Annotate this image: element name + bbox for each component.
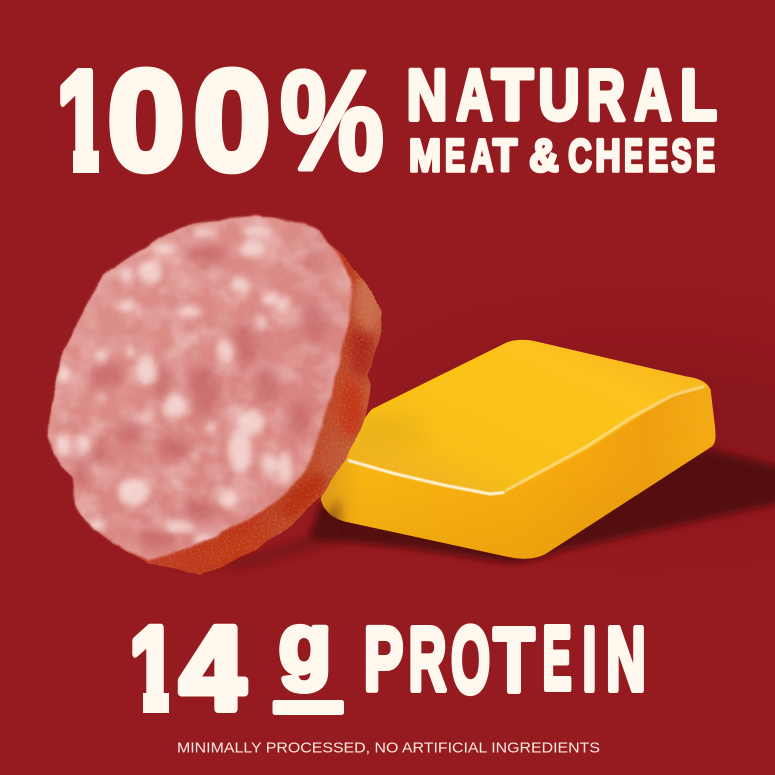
heading: natural: U [538, 55, 580, 135]
word: protein: P [364, 610, 403, 710]
heading: natural: N [407, 55, 447, 135]
illustration: sausage slice [40, 205, 390, 585]
heading: meat and cheese [409, 129, 715, 182]
fat blobs [55, 227, 292, 542]
heading: meat and cheese: E [696, 131, 715, 182]
word: protein: T [494, 609, 534, 710]
stat number: 14 [132, 624, 248, 713]
heading: meat and cheese: M [409, 130, 441, 181]
stat number: 14: 1 [129, 602, 177, 734]
cheese body [320, 340, 716, 559]
cheese top face [350, 335, 713, 493]
illustration: cheese cube [310, 330, 775, 570]
heading: meat and cheese: C [568, 131, 592, 181]
stat number: 14: 4 [180, 602, 245, 734]
footnote: MINIMALLY PROCESSED, NO ARTIFICIAL INGREDIENTS [177, 740, 600, 756]
heading: natural: T [492, 56, 533, 135]
sausage crust [40, 205, 390, 585]
sausage face with fat marbling [46, 214, 354, 562]
heading: natural: L [680, 56, 717, 135]
cheese highlight edges [349, 461, 503, 494]
heading: natural: A [457, 56, 492, 135]
unit: g with underline: g [279, 597, 331, 692]
heading: meat and cheese: A [471, 131, 493, 182]
lean meat patches [71, 246, 328, 546]
title: 100% natural meat and cheese [60, 66, 718, 174]
heading: meat and cheese: E [445, 131, 465, 182]
heading: meat and cheese: & [529, 131, 559, 182]
headline number: 100%: % [280, 43, 384, 199]
word: protein: N [606, 609, 646, 709]
heading: meat and cheese: T [493, 130, 517, 182]
word: protein: O [451, 607, 490, 712]
heading: natural [407, 55, 717, 136]
sausage body [40, 205, 390, 585]
heading: meat and cheese: S [671, 131, 692, 182]
word: protein: I [583, 610, 596, 710]
word: protein [364, 607, 646, 712]
headline number: 100%: 1 [57, 42, 107, 200]
word: protein: R [409, 608, 446, 710]
unit: g with underline [272, 597, 344, 715]
heading: meat and cheese: E [648, 131, 668, 182]
stat: 14 g protein [132, 623, 644, 715]
headline number: 100%: 0 [108, 41, 184, 199]
cheese shadow [310, 450, 775, 563]
heading: natural: A [635, 56, 671, 136]
heading: meat and cheese: E [624, 131, 643, 182]
headline number: 100%: 0 [194, 41, 270, 199]
word: protein: E [542, 608, 572, 708]
sausage shadow [140, 498, 340, 568]
headline number: 100% [60, 66, 384, 174]
heading: natural: R [587, 56, 625, 135]
soft background shading behind the food [400, 345, 775, 515]
heading: meat and cheese: H [595, 129, 621, 181]
